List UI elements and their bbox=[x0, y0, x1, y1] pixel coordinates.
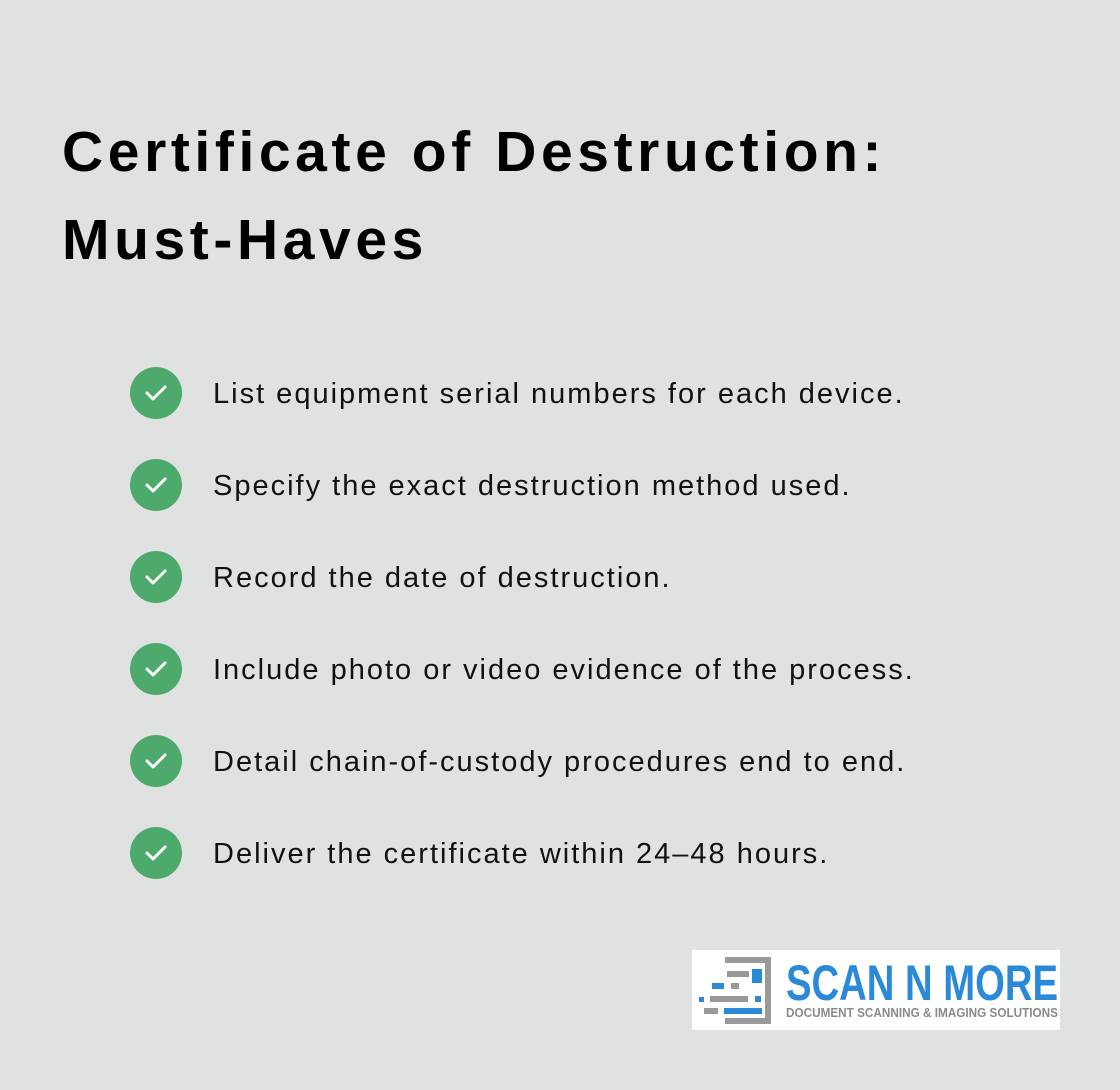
item 1: List equipment serial numbers for each device. bbox=[213, 378, 905, 410]
item 2: Specify the exact destruction method used. bbox=[213, 470, 852, 502]
item 2 bbox=[130, 459, 852, 511]
title bbox=[62, 120, 886, 272]
item 4: Include photo or video evidence of the process. bbox=[213, 654, 915, 686]
title: Must-Haves bbox=[62, 208, 428, 272]
item 3: Record the date of destruction. bbox=[213, 562, 672, 594]
logo bbox=[692, 950, 1060, 1030]
item 4 bbox=[130, 643, 915, 695]
icon: scanner bbox=[699, 957, 771, 1024]
item 3 bbox=[130, 551, 672, 603]
item 5: Detail chain-of-custody procedures end to end. bbox=[213, 746, 906, 778]
item 6: Deliver the certificate within 24–48 hours. bbox=[213, 838, 829, 870]
title: Certificate of Destruction: bbox=[62, 120, 886, 184]
item 6 bbox=[130, 827, 829, 879]
item 5 bbox=[130, 735, 906, 787]
item 1 bbox=[130, 367, 905, 419]
